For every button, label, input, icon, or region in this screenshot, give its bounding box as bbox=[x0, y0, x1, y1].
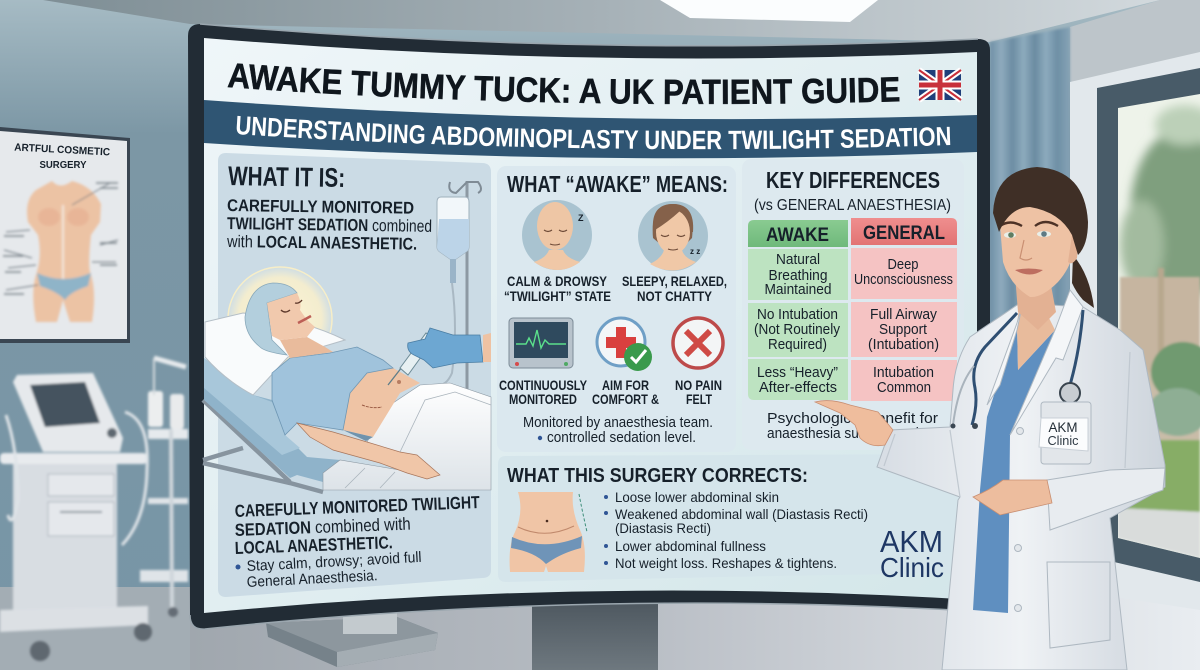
subheading: (vs GENERAL ANAESTHESIA) bbox=[754, 197, 951, 214]
icon: calm drowsy face: Z bbox=[578, 213, 584, 223]
labels: state descriptions: CALM & DROWSY bbox=[507, 273, 608, 289]
head with surgical cap bbox=[245, 283, 297, 355]
table: general column: Full Airway bbox=[870, 307, 938, 323]
bottom text block: SEDATION combined with bbox=[234, 514, 411, 540]
labels: monitoring items: NO PAIN bbox=[675, 377, 722, 393]
labels: monitoring items: AIM FOR bbox=[602, 377, 649, 393]
labels: state descriptions: NOT CHATTY bbox=[637, 288, 713, 304]
illustration: abdomen before surgery bbox=[510, 492, 587, 572]
icon: sleepy relaxed face: z z bbox=[690, 247, 700, 256]
table: awake column: AWAKE bbox=[766, 224, 829, 246]
name badge: AKM Clinic bbox=[1039, 402, 1091, 464]
coat sleeve shading bbox=[884, 352, 1130, 497]
art poster: Artful Cosmetic Surgery: SURGERY bbox=[40, 159, 86, 171]
bullet list of corrections bbox=[604, 489, 868, 571]
aesthetic machine on cart bbox=[0, 373, 152, 661]
table: general column bbox=[851, 218, 957, 401]
stethoscope bbox=[950, 310, 1083, 429]
scrub top bbox=[973, 323, 1055, 613]
labels: state descriptions bbox=[504, 273, 727, 304]
folded arm with hand bbox=[973, 468, 1165, 530]
intro text block: with LOCAL ANAESTHETIC. bbox=[226, 232, 417, 254]
art poster: Artful Cosmetic Surgery bbox=[0, 127, 130, 343]
syringe bbox=[388, 333, 434, 385]
chest skin bbox=[1017, 300, 1055, 370]
table: general column: Deep bbox=[888, 257, 918, 273]
labels: monitoring items bbox=[499, 377, 722, 407]
monitor bezel bbox=[188, 24, 990, 629]
name badge: AKM Clinic: Clinic bbox=[1048, 433, 1079, 448]
white coat bbox=[877, 303, 1165, 670]
bullet list of corrections: Not weight loss. Reshapes & tightens. bbox=[615, 555, 837, 571]
table: awake column: Required) bbox=[768, 337, 827, 353]
illustration: patient on reclined bed bbox=[203, 283, 491, 492]
panel: what this surgery corrects bbox=[498, 454, 968, 583]
heading: what it is: WHAT IT IS: bbox=[228, 161, 345, 193]
note: monitored by anaesthesia team bbox=[523, 415, 713, 446]
window with garden view bbox=[1070, 52, 1200, 610]
title: AWAKE TUMMY TUCK: A UK PATIENT GUIDE bbox=[228, 63, 900, 104]
pillow bbox=[205, 313, 345, 395]
logo: AKM Clinic: Clinic bbox=[880, 552, 944, 583]
coat lapels bbox=[987, 290, 1083, 435]
bullet list of corrections: (Diastasis Recti) bbox=[615, 520, 711, 536]
bullet list of corrections: Lower abdominal fullness bbox=[615, 538, 766, 554]
garden bbox=[1118, 105, 1200, 558]
hair bbox=[993, 167, 1088, 255]
bottom text block: General Anaesthesia. bbox=[246, 567, 378, 591]
labels: monitoring items: FELT bbox=[686, 391, 712, 407]
glow halo behind head bbox=[228, 267, 332, 371]
note: monitored by anaesthesia team: Monitored by anaesthesia team. bbox=[523, 415, 713, 431]
art poster: Artful Cosmetic Surgery: ARTFUL COSMETIC bbox=[14, 142, 111, 159]
gown bbox=[272, 347, 393, 435]
heading: key differences: KEY DIFFERENCES bbox=[766, 167, 940, 193]
table: general column: Support bbox=[879, 322, 927, 338]
name badge: AKM Clinic: AKM bbox=[1048, 420, 1078, 435]
labels: state descriptions: SLEEPY, RELAXED, bbox=[622, 273, 727, 289]
poster: torso diagram bbox=[3, 181, 118, 322]
neck and face bbox=[1000, 205, 1077, 330]
note: monitored by anaesthesia team: controlled sedation level. bbox=[547, 430, 696, 446]
abdomen skin bbox=[343, 368, 420, 437]
labels: monitoring items: COMFORT & bbox=[592, 391, 659, 407]
icon: medical cross with check bbox=[597, 318, 652, 371]
table: awake column: No Intubation bbox=[757, 307, 838, 323]
note: psychological benefit: Psychological benefit for bbox=[767, 411, 938, 427]
panel: key differences bbox=[742, 159, 964, 450]
bullet list of corrections: Weakened abdominal wall (Diastasis Recti) bbox=[615, 506, 868, 522]
bottom text block: Stay calm, drowsy; avoid full bbox=[246, 549, 422, 575]
side trolley with bottles bbox=[140, 358, 188, 617]
table: awake column: Maintained bbox=[764, 282, 832, 298]
table: general column: Common bbox=[877, 380, 931, 396]
bottom text block bbox=[234, 492, 480, 591]
neck bbox=[280, 337, 333, 358]
logo: AKM Clinic: AKM bbox=[880, 524, 943, 559]
intro text block: TWILIGHT SEDATION combined bbox=[227, 214, 432, 236]
icon: calm drowsy face bbox=[522, 200, 592, 270]
arm and hand bbox=[297, 423, 440, 479]
panel: what it is bbox=[203, 153, 491, 597]
labels: state descriptions: “TWILIGHT” STATE bbox=[504, 288, 611, 304]
table: awake column: Natural bbox=[776, 252, 820, 268]
pointing hand bbox=[815, 401, 893, 446]
icon: patient monitor bbox=[509, 318, 573, 368]
monitor stand bbox=[266, 598, 658, 670]
table: general column: Intubation bbox=[873, 365, 934, 381]
icon: sleepy relaxed face bbox=[638, 201, 708, 271]
table: awake column bbox=[748, 220, 848, 400]
icon: IV drip bbox=[437, 181, 481, 392]
gloved hand bbox=[408, 328, 483, 368]
ponytail bbox=[1072, 255, 1094, 308]
table: general column: (Intubation) bbox=[868, 337, 939, 353]
table: awake column: Less “Heavy” bbox=[757, 365, 838, 381]
coat pocket and buttons bbox=[1014, 428, 1110, 648]
intro text block bbox=[226, 196, 432, 254]
table: awake column: (Not Routinely bbox=[754, 322, 841, 338]
icon: no pain cross bbox=[673, 318, 723, 368]
bottom text block: CAREFULLY MONITORED TWILIGHT bbox=[234, 492, 480, 521]
panel: what awake means bbox=[497, 166, 736, 452]
labels: monitoring items: MONITORED bbox=[509, 391, 577, 407]
heading: what awake means: WHAT “AWAKE” MEANS: bbox=[507, 171, 728, 197]
trousers bbox=[972, 600, 1010, 670]
bottom text block: LOCAL ANAESTHETIC. bbox=[234, 532, 393, 558]
table: general column: Unconsciousness bbox=[854, 272, 953, 288]
table: awake column: After-effects bbox=[759, 380, 837, 396]
labels: monitoring items: CONTINUOUSLY bbox=[499, 377, 588, 393]
white sheet bbox=[323, 383, 491, 490]
heading: what this surgery corrects: WHAT THIS SURGERY CORRECTS: bbox=[507, 465, 808, 487]
arm above glove bbox=[483, 333, 491, 362]
bed frame bbox=[203, 400, 323, 492]
table: awake column: Breathing bbox=[768, 268, 828, 284]
logo: AKM Clinic bbox=[880, 524, 944, 583]
bullet list of corrections: Loose lower abdominal skin bbox=[615, 489, 779, 505]
icon: UK flag bbox=[919, 70, 961, 100]
clinician presenter bbox=[815, 167, 1165, 670]
table: general column: GENERAL bbox=[863, 222, 945, 244]
bed mattress bbox=[204, 358, 340, 482]
subtitle banner: UNDERSTANDING ABDOMINOPLASTY UNDER TWILIGHT SEDATION bbox=[236, 116, 950, 150]
monitor display bbox=[204, 38, 977, 613]
intro text block: CAREFULLY MONITORED bbox=[227, 196, 414, 218]
note: psychological benefit bbox=[767, 411, 938, 442]
note: psychological benefit: anaesthesia surgery anxiety bbox=[767, 426, 938, 442]
curtains bbox=[990, 27, 1070, 600]
